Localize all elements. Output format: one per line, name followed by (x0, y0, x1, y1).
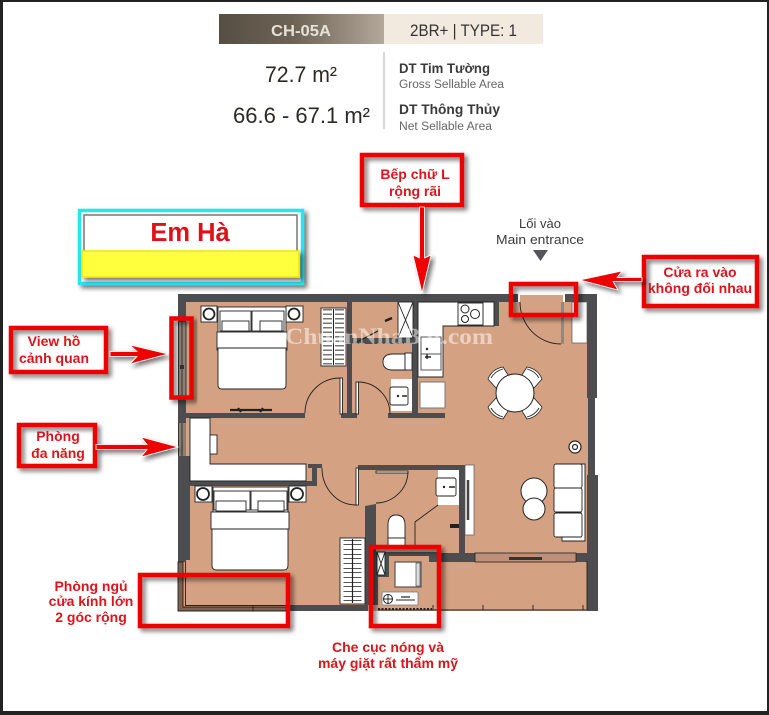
tv unit living room (465, 465, 474, 535)
window: lake view (178, 322, 186, 396)
area figures: DT Tim Tường (399, 60, 490, 76)
highlight: bedroom corner window (140, 575, 288, 626)
area figures: Gross Sellable Area (399, 79, 505, 91)
floor (179, 295, 588, 611)
area figures: DT Thông Thủy (399, 101, 500, 117)
name card (80, 210, 302, 284)
callout: L-shaped kitchen (362, 155, 462, 205)
dining table (488, 367, 542, 419)
main entrance label: Lối vào (519, 216, 561, 231)
header bar (219, 14, 543, 44)
bedroom 1 door (305, 378, 342, 414)
corner window (178, 562, 286, 611)
callout: multipurpose room: đa năng (31, 445, 85, 461)
arrow: kitchen (413, 207, 431, 293)
arrow: lake view (110, 345, 168, 364)
walls (178, 294, 598, 611)
callout: multipurpose room: Phòng (36, 428, 80, 444)
watermark: ChuanNhaBat.com (285, 324, 493, 349)
service balcony: shaft, washing machine, AC unit (377, 552, 421, 605)
callout text: glass door line 2: cửa kính lớn (49, 593, 133, 609)
highlight: lake view window (172, 318, 192, 398)
callout: doors not facing: không đối nhau (648, 280, 752, 296)
callout: doors not facing (644, 257, 757, 306)
bathroom 1 fixtures (356, 353, 412, 414)
callout: lake view: View hồ (28, 333, 80, 349)
entrance door (518, 294, 587, 344)
area figures: Net Sellable Area (399, 121, 493, 133)
callout: outdoor unit and washer: máy giặt rất thẩm mỹ (318, 655, 458, 671)
callout: lake view: cảnh quan (19, 350, 89, 366)
callout text: glass door line 3: 2 góc rộng (55, 609, 127, 625)
area figures: 72.7 m² (265, 62, 337, 87)
callout: L-shaped kitchen: rộng rãi (389, 183, 441, 199)
main entrance label (496, 216, 584, 261)
multipurpose counter (190, 418, 306, 481)
sofa (521, 464, 585, 541)
callout: outdoor unit and washer (318, 639, 458, 671)
balcony railing (378, 561, 587, 610)
bedroom 2 furniture (195, 486, 365, 604)
name card: Em Hà (150, 219, 230, 247)
upper service room (355, 302, 413, 343)
header bar: CH-05A (271, 23, 331, 40)
callout: outdoor unit and washer: Che cục nóng và (332, 639, 444, 655)
bedroom 2 door (322, 468, 358, 505)
fridge (420, 382, 445, 408)
floor plan (178, 294, 598, 611)
window: multipurpose room (178, 423, 186, 456)
arrow: multipurpose room (96, 437, 178, 457)
area figures (233, 52, 505, 133)
area figures: 66.6 - 67.1 m² (233, 103, 370, 128)
bedroom 1 furniture (201, 306, 346, 412)
balcony door (475, 553, 576, 562)
highlight: entrance door (511, 284, 576, 315)
main entrance label: Main entrance (496, 232, 584, 247)
callout: L-shaped kitchen: Bếp chữ L (380, 166, 450, 182)
arrow: doors (580, 271, 642, 290)
header bar: 2BR+ | TYPE: 1 (410, 21, 517, 40)
ceiling fixture (569, 441, 581, 453)
callout: bedroom glass door: Phòng ngủ (54, 578, 128, 594)
callout: doors not facing: Cửa ra vào (663, 264, 737, 280)
kitchen counter (418, 302, 494, 377)
highlight: service balcony (371, 547, 439, 626)
callout: multipurpose room (19, 425, 95, 466)
bathroom 2 fixtures (376, 470, 459, 546)
callout: lake view (11, 328, 106, 372)
